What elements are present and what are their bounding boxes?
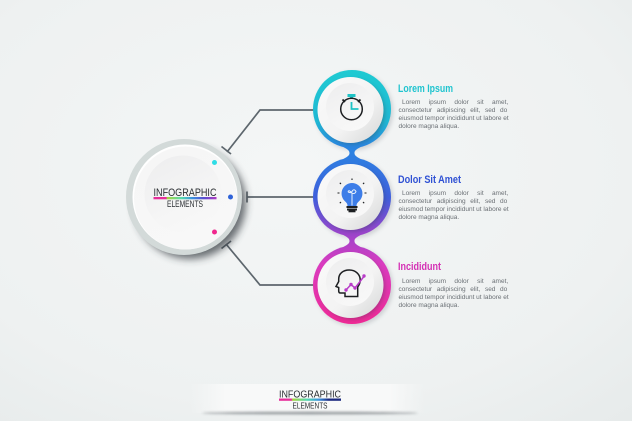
dot: cyan xyxy=(212,160,217,165)
logo: infographic elements xyxy=(154,187,217,209)
footer logo plate xyxy=(190,384,425,414)
dot: pink xyxy=(212,230,217,234)
text block: Lorem Ipsum: Lorem ipsum dolor sit amet, xyxy=(402,99,508,106)
text block: Incididunt: eiusmod tempor incididunt ut labore et xyxy=(398,294,509,301)
text block: Dolor Sit Amet: consectetur adipiscing elit, sed do xyxy=(398,198,508,205)
text block: Dolor Sit Amet: Dolor Sit Amet xyxy=(398,174,461,186)
icon: light bulb xyxy=(338,178,366,212)
connector: middle line xyxy=(247,192,316,202)
text block: Lorem Ipsum: eiusmod tempor incididunt ut labore et xyxy=(398,115,509,122)
footer logo text: ELEMENTS xyxy=(292,402,328,410)
logo: infographic elements: INFOGRAPHIC xyxy=(154,187,217,199)
connector: top line xyxy=(222,110,316,154)
connector: bottom line xyxy=(222,241,316,285)
text block: Incididunt: dolore magna aliqua. xyxy=(398,302,459,309)
panel: item 2 disc xyxy=(318,164,384,230)
panel: item 1 disc xyxy=(318,77,384,143)
text block: Lorem Ipsum xyxy=(398,83,509,130)
text block: Lorem Ipsum: Lorem Ipsum xyxy=(398,83,453,95)
panel: item 3 disc xyxy=(318,252,384,318)
panel: ring chain xyxy=(313,70,393,326)
text block: Lorem Ipsum: dolore magna aliqua. xyxy=(398,123,459,130)
text block: Incididunt xyxy=(398,261,509,309)
panel: central circle xyxy=(126,139,246,259)
icon: head with rising chart xyxy=(336,270,366,296)
text block: Incididunt: Incididunt xyxy=(398,261,441,273)
footer logo text: INFOGRAPHIC xyxy=(279,388,341,400)
icon: stopwatch xyxy=(341,94,362,120)
text block: Dolor Sit Amet: eiusmod tempor incididunt ut labore et xyxy=(398,206,509,213)
text block: Lorem Ipsum: consectetur adipiscing elit, sed do xyxy=(398,107,508,114)
dot: blue xyxy=(228,194,233,200)
text block: Dolor Sit Amet: dolore magna aliqua. xyxy=(398,214,459,221)
text block: Dolor Sit Amet: Lorem ipsum dolor sit amet, xyxy=(402,190,508,197)
text block: Dolor Sit Amet xyxy=(398,174,509,221)
text block: Incididunt: consectetur adipiscing elit, sed do xyxy=(398,286,508,293)
disc shadows xyxy=(320,80,385,320)
text block: Incididunt: Lorem ipsum dolor sit amet, xyxy=(402,278,508,285)
footer logo text xyxy=(279,388,341,410)
logo: infographic elements: ELEMENTS xyxy=(167,199,203,209)
